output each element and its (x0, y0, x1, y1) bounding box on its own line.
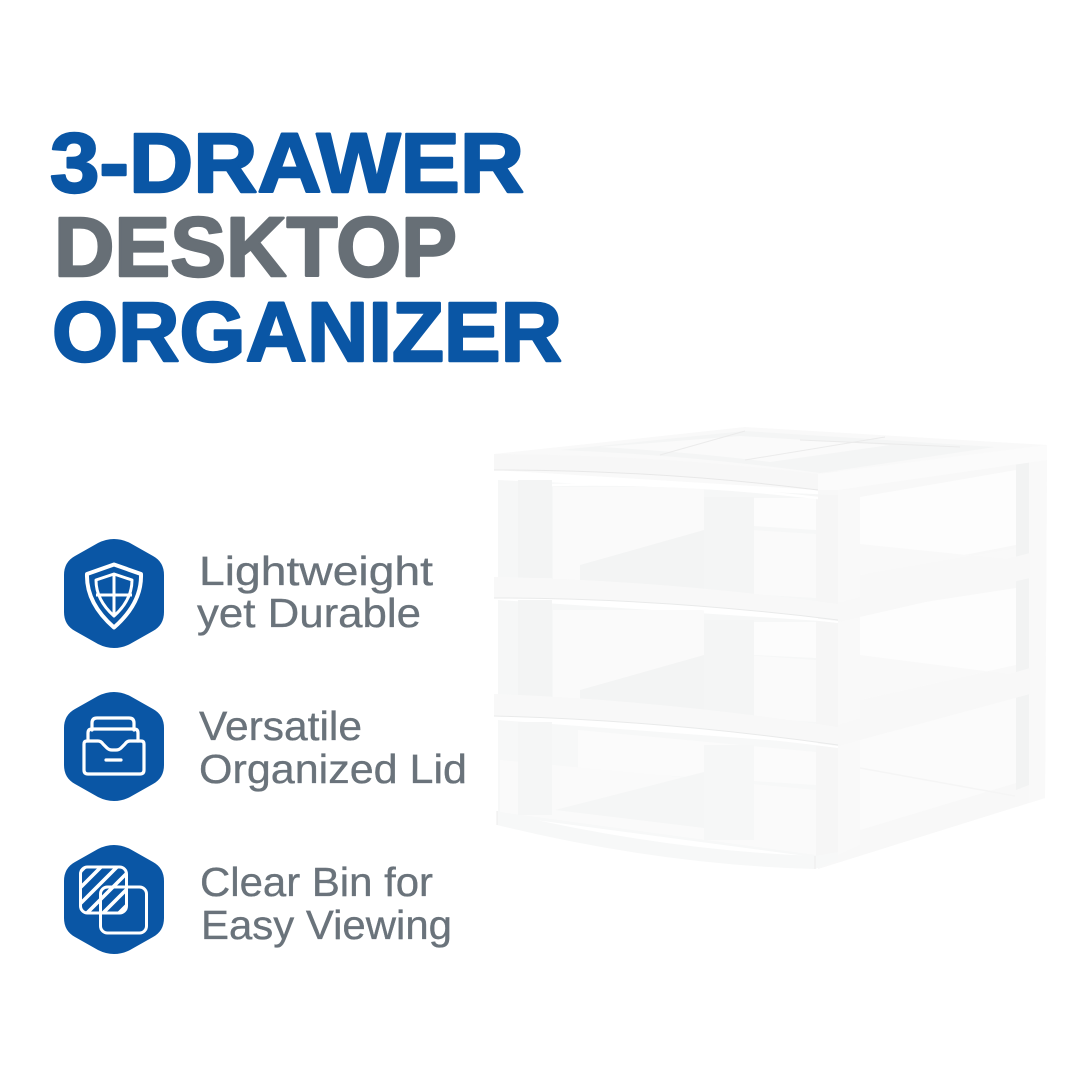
label: lightweight yet durable: Lightweight (199, 548, 434, 594)
label: clear bin for easy viewing (200, 859, 452, 948)
title: DESKTOP (54, 200, 457, 294)
feature: lightweight yet durable (64, 539, 434, 648)
title: ORGANIZER (52, 285, 562, 379)
product: three-drawer organizer (494, 427, 1047, 869)
feature: versatile organized lid (64, 692, 467, 801)
middle drawer (498, 600, 838, 728)
label: clear bin for easy viewing: Easy Viewing (201, 902, 452, 948)
bottom drawer (498, 720, 838, 860)
label: versatile organized lid: Versatile (199, 703, 362, 749)
top drawer (498, 480, 838, 604)
title (50, 116, 562, 379)
label: lightweight yet durable: yet Durable (197, 590, 421, 636)
label: versatile organized lid: Organized Lid (199, 746, 467, 792)
drawer rims (494, 577, 838, 869)
icon: file tray (64, 692, 164, 801)
icon: shield (64, 539, 164, 648)
label: clear bin for easy viewing: Clear Bin for (200, 859, 433, 905)
icon: overlapping clear panels (64, 845, 164, 954)
cabinet side (818, 458, 1047, 869)
lid (494, 427, 1047, 498)
feature: clear bin for easy viewing (64, 845, 452, 954)
title: 3-DRAWER (50, 116, 524, 210)
label: lightweight yet durable (197, 548, 434, 636)
label: versatile organized lid (199, 703, 467, 792)
